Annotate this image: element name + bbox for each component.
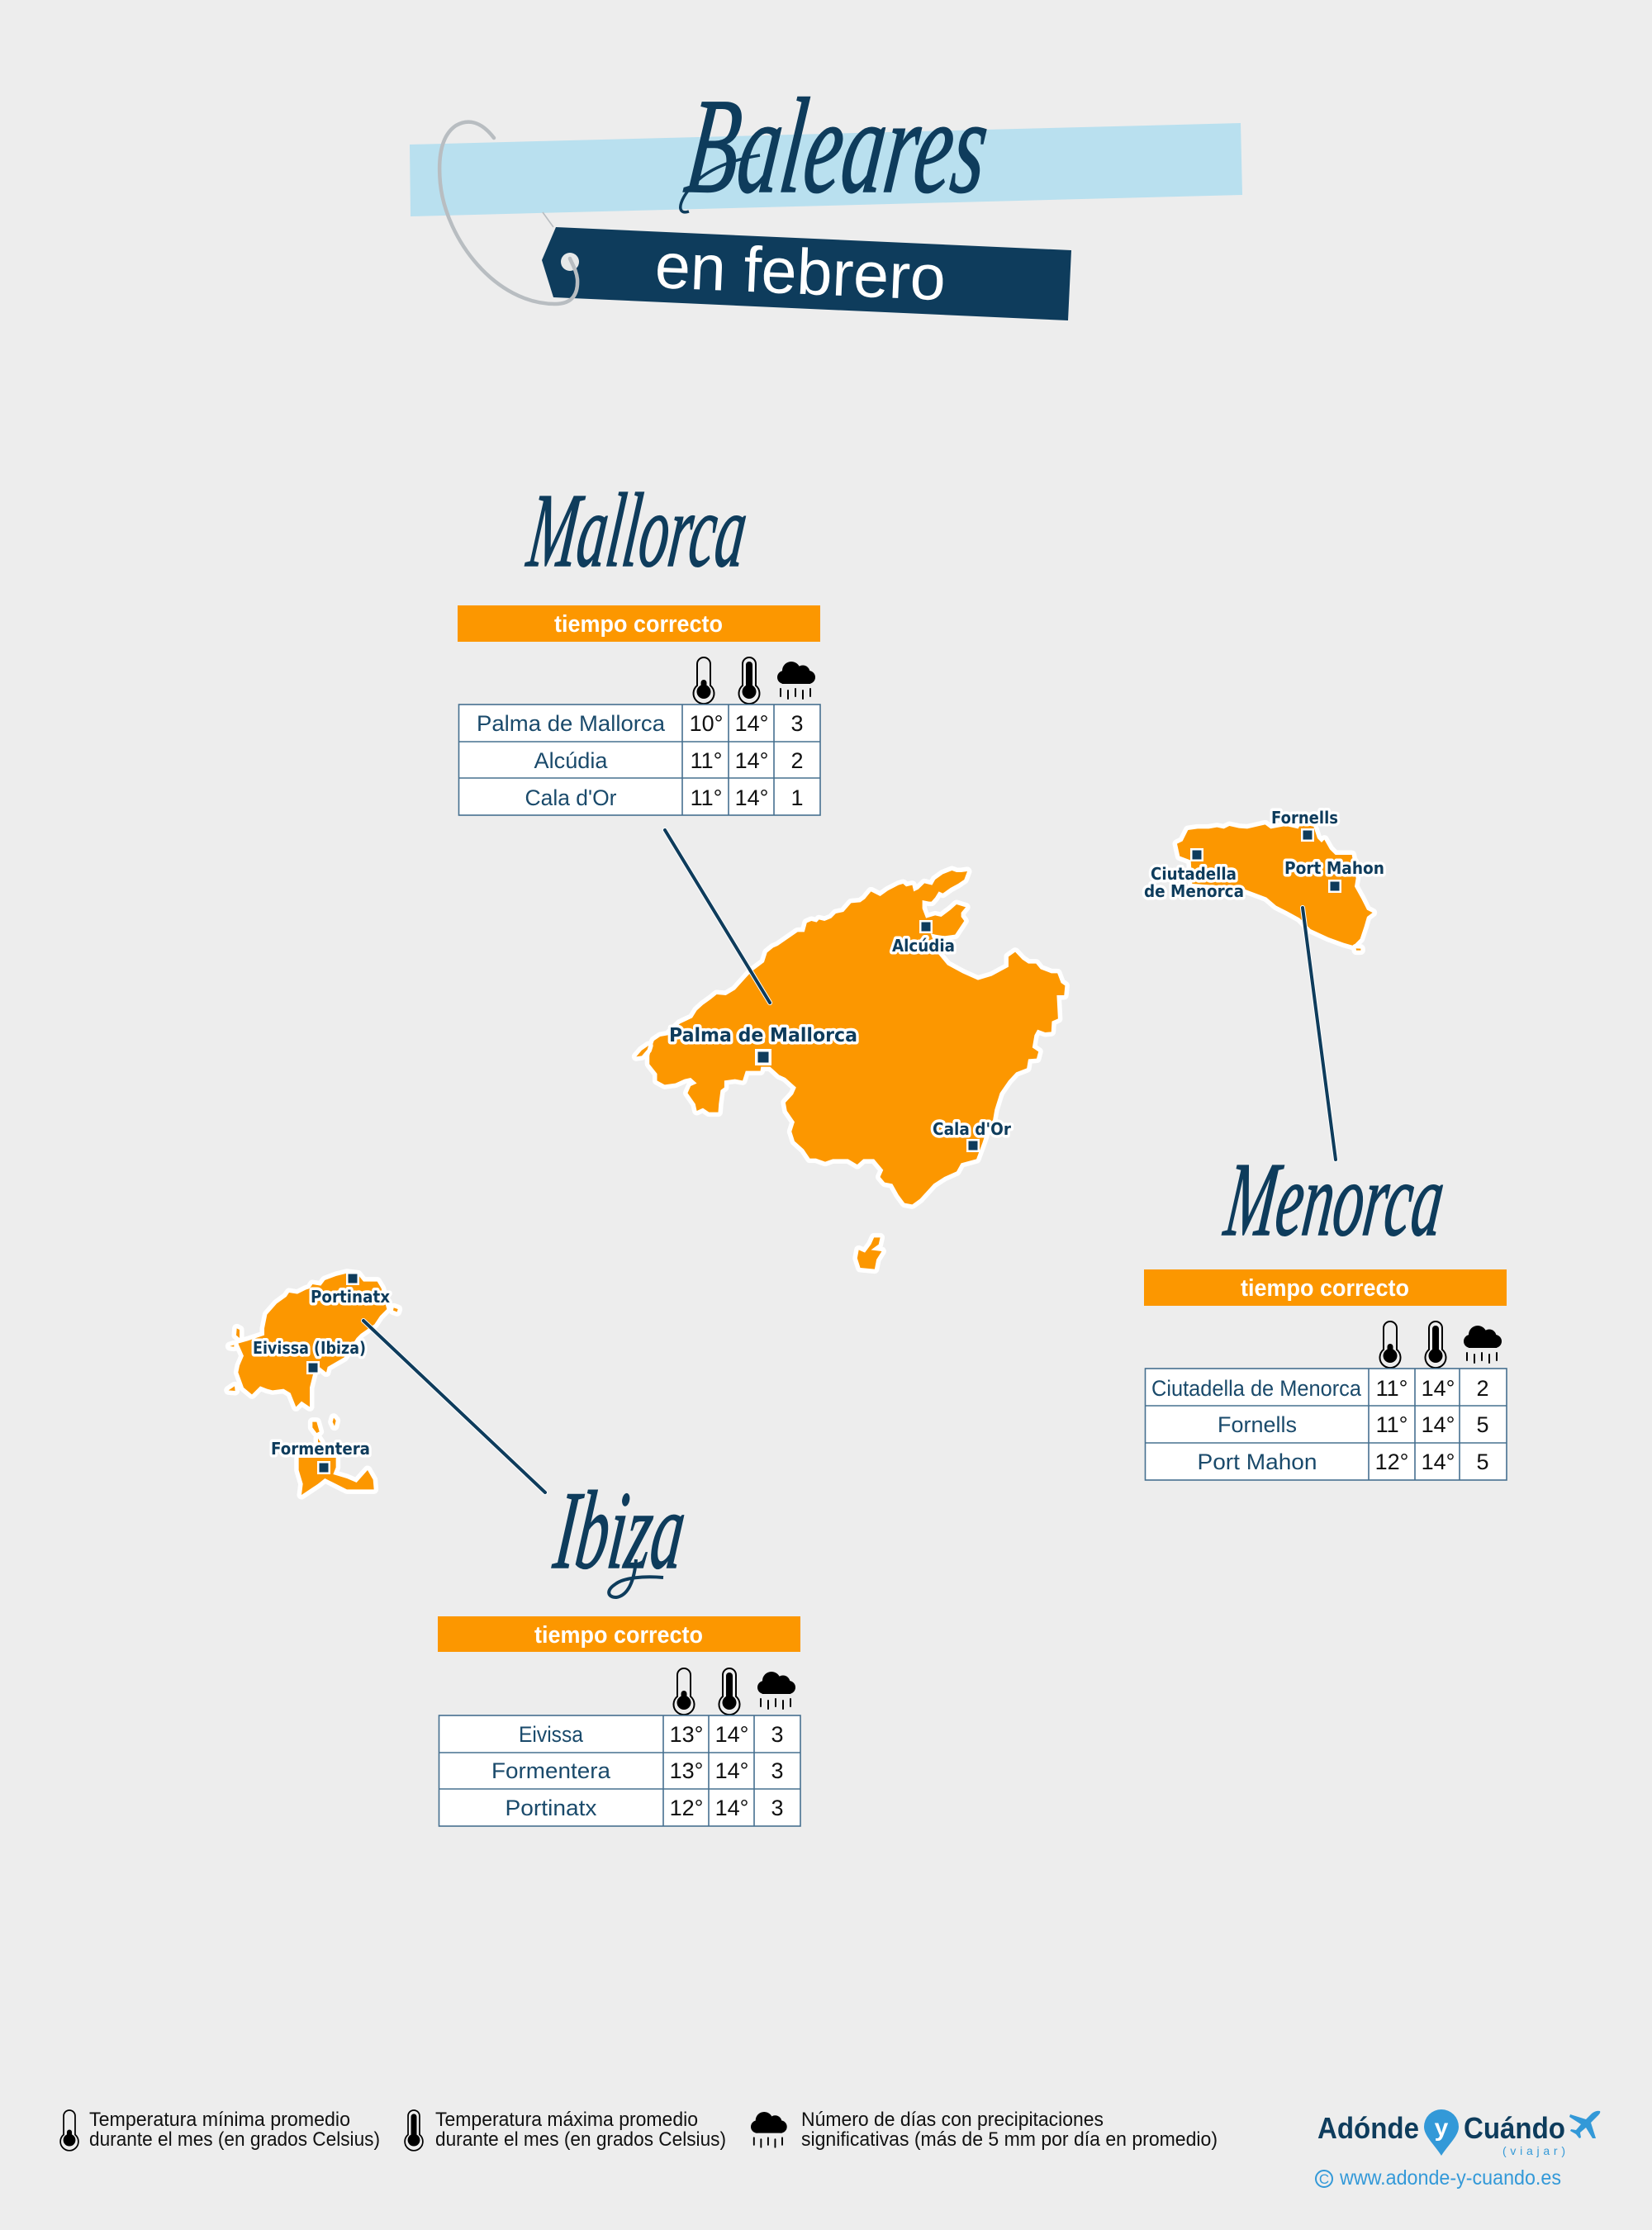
title: Baleares <box>679 70 996 221</box>
weather table: 12° <box>1375 1450 1408 1474</box>
map: Menorca <box>1177 824 1373 951</box>
legend text: maximum temperature <box>435 2109 726 2151</box>
city marker: Palma de Mallorca: Palma de Mallorca <box>669 1025 857 1046</box>
website: C <box>1319 2171 1329 2187</box>
weather table: 11° <box>1376 1376 1408 1401</box>
logo pin <box>1424 2109 1459 2156</box>
city marker: Ciutadella de Menorca <box>1144 851 1244 901</box>
Cabrera islet <box>857 1237 881 1269</box>
city marker: Portinatx: Portinatx <box>311 1287 390 1307</box>
icon: maximum temperature <box>719 1668 740 1715</box>
weather banner <box>438 1616 800 1652</box>
weather table <box>1145 1369 1507 1480</box>
leader line: Menorca <box>1303 908 1336 1160</box>
heading: Mallorca: Mallorca <box>521 472 753 589</box>
icon: minimum temperature <box>674 1668 694 1715</box>
weather table: 2 <box>790 748 804 773</box>
weather table: Port Mahon <box>1198 1450 1317 1474</box>
city marker: Fornells <box>1271 808 1338 839</box>
weather banner <box>458 605 820 642</box>
legend text: rain <box>801 2109 1218 2151</box>
logo wordmark left: Adónde <box>1317 2111 1419 2145</box>
weather table: Alcúdia <box>534 748 608 773</box>
panel: Ibiza <box>438 1468 800 1826</box>
weather table: 3 <box>771 1722 784 1747</box>
Mallorca main island shape <box>649 871 1065 1204</box>
weather banner: tiempo correcto <box>534 1622 703 1649</box>
icon: maximum temperature <box>738 657 760 704</box>
icon: rain <box>757 1672 795 1709</box>
Ibiza islets <box>229 1307 398 1391</box>
weather table: Eivissa <box>519 1722 584 1747</box>
logo: Adónde y Cuándo <box>1316 2109 1600 2190</box>
weather table: 14° <box>1422 1412 1455 1437</box>
weather table: 14° <box>1422 1450 1455 1474</box>
Menorca island shape <box>1177 824 1373 946</box>
weather table: 11° <box>691 748 722 773</box>
weather table <box>458 705 820 815</box>
legend icon: minimum temperature <box>60 2110 78 2151</box>
city marker: Fornells: Fornells <box>1271 808 1338 828</box>
weather table: 14° <box>735 748 768 773</box>
city marker: Formentera: Formentera <box>271 1439 370 1459</box>
weather table: 14° <box>715 1722 748 1747</box>
light blue title band <box>410 123 1242 216</box>
panel: Mallorca <box>458 472 820 815</box>
string thin end <box>543 212 553 227</box>
title block <box>410 70 1242 320</box>
weather banner: tiempo correcto <box>1241 1275 1409 1302</box>
weather table: 13° <box>670 1758 703 1783</box>
weather table: Portinatx <box>506 1796 597 1820</box>
weather table: 5 <box>1476 1412 1489 1437</box>
Dragonera islet <box>636 1046 648 1056</box>
weather table: Fornells <box>1218 1412 1297 1437</box>
website: www.adonde-y-cuando.es <box>1339 2166 1561 2190</box>
weather table: Palma de Mallorca <box>477 711 666 736</box>
city marker: Alcúdia: Alcúdia <box>892 936 955 956</box>
weather table: 11° <box>691 785 722 810</box>
Menorca southern rock <box>1356 948 1360 951</box>
Ibiza island shape <box>238 1274 387 1407</box>
weather table: 3 <box>790 711 804 736</box>
weather table: 14° <box>735 785 768 810</box>
city marker: Ciutadella de Menorca: de Menorca <box>1144 881 1244 901</box>
weather table: 12° <box>670 1796 703 1820</box>
legend text: maximum temperature: durante el mes (en grados Celsius) <box>435 2128 726 2151</box>
leader line: Mallorca <box>665 830 770 1003</box>
icon: rain <box>1464 1326 1502 1363</box>
legend text: maximum temperature: Temperatura máxima promedio <box>435 2109 698 2131</box>
city marker: Palma de Mallorca <box>669 1025 857 1062</box>
weather table: Ciutadella de Menorca <box>1151 1376 1362 1401</box>
icon: maximum temperature <box>1426 1321 1446 1368</box>
city marker: Eivissa (Ibiza): Eivissa (Ibiza) <box>253 1338 366 1358</box>
weather banner <box>1144 1269 1507 1306</box>
legend text: minimum temperature: durante el mes (en grados Celsius) <box>89 2128 380 2151</box>
weather table: 14° <box>735 711 768 736</box>
icon: rain <box>777 662 815 699</box>
city marker: Formentera <box>271 1439 370 1472</box>
legend text: rain: significativas (más de 5 mm por día en promedio) <box>801 2128 1218 2151</box>
city marker: Cala d'Or <box>933 1119 1011 1150</box>
icon: minimum temperature <box>694 657 714 704</box>
heading: Ibiza <box>548 1468 692 1597</box>
heading: Menorca: Menorca <box>1218 1141 1450 1258</box>
weather table: 14° <box>715 1758 748 1783</box>
Formentera island shape <box>299 1458 374 1495</box>
logo pin: y <box>1435 2114 1449 2142</box>
city marker: Eivissa (Ibiza) <box>253 1338 366 1373</box>
city marker: Ciutadella de Menorca: Ciutadella <box>1151 864 1237 884</box>
leader line: Ibiza <box>363 1321 545 1492</box>
city marker: Portinatx <box>311 1274 390 1307</box>
legend text: rain: Número de días con precipitaciones <box>801 2109 1104 2131</box>
map: Ibiza and Formentera <box>229 1274 398 1495</box>
weather table: 5 <box>1476 1450 1489 1474</box>
weather banner: tiempo correcto <box>554 611 723 638</box>
weather table: 1 <box>790 785 804 810</box>
weather table: 14° <box>715 1796 748 1820</box>
legend <box>60 2109 1218 2151</box>
title: Baleares: Baleares <box>679 70 996 221</box>
price tag with subtitle: en febrero <box>653 229 947 314</box>
weather table: 3 <box>771 1758 784 1783</box>
city marker: Port Mahon <box>1284 858 1384 890</box>
logo wordmark right: Cuándo <box>1464 2111 1565 2145</box>
weather table: Cala d'Or <box>525 785 616 810</box>
heading: Ibiza: Ibiza <box>548 1468 692 1592</box>
legend icon: maximum temperature <box>405 2110 423 2151</box>
weather table: 10° <box>690 711 723 736</box>
icon: airplane <box>1569 2111 1600 2138</box>
panel: Menorca <box>1144 1141 1507 1480</box>
weather table: 2 <box>1476 1376 1489 1401</box>
map: Mallorca <box>636 871 1065 1269</box>
weather table: Formentera <box>491 1758 611 1783</box>
weather table: 3 <box>771 1796 784 1820</box>
legend text: minimum temperature <box>89 2109 380 2151</box>
weather table: 14° <box>1422 1376 1455 1401</box>
weather table <box>439 1715 800 1826</box>
logo tagline: (viajar) <box>1502 2144 1565 2157</box>
city marker: Alcúdia <box>892 922 955 956</box>
weather table: 13° <box>670 1722 703 1747</box>
legend text: minimum temperature: Temperatura mínima promedio <box>89 2109 350 2131</box>
Formentera islets <box>312 1418 336 1443</box>
string loop <box>439 122 577 304</box>
city marker: Cala d'Or: Cala d'Or <box>933 1119 1011 1139</box>
weather table: 11° <box>1376 1412 1408 1437</box>
city marker: Port Mahon: Port Mahon <box>1284 858 1384 878</box>
legend icon: rain <box>751 2112 787 2147</box>
icon: minimum temperature <box>1379 1321 1401 1368</box>
price tag with subtitle <box>542 227 1071 320</box>
